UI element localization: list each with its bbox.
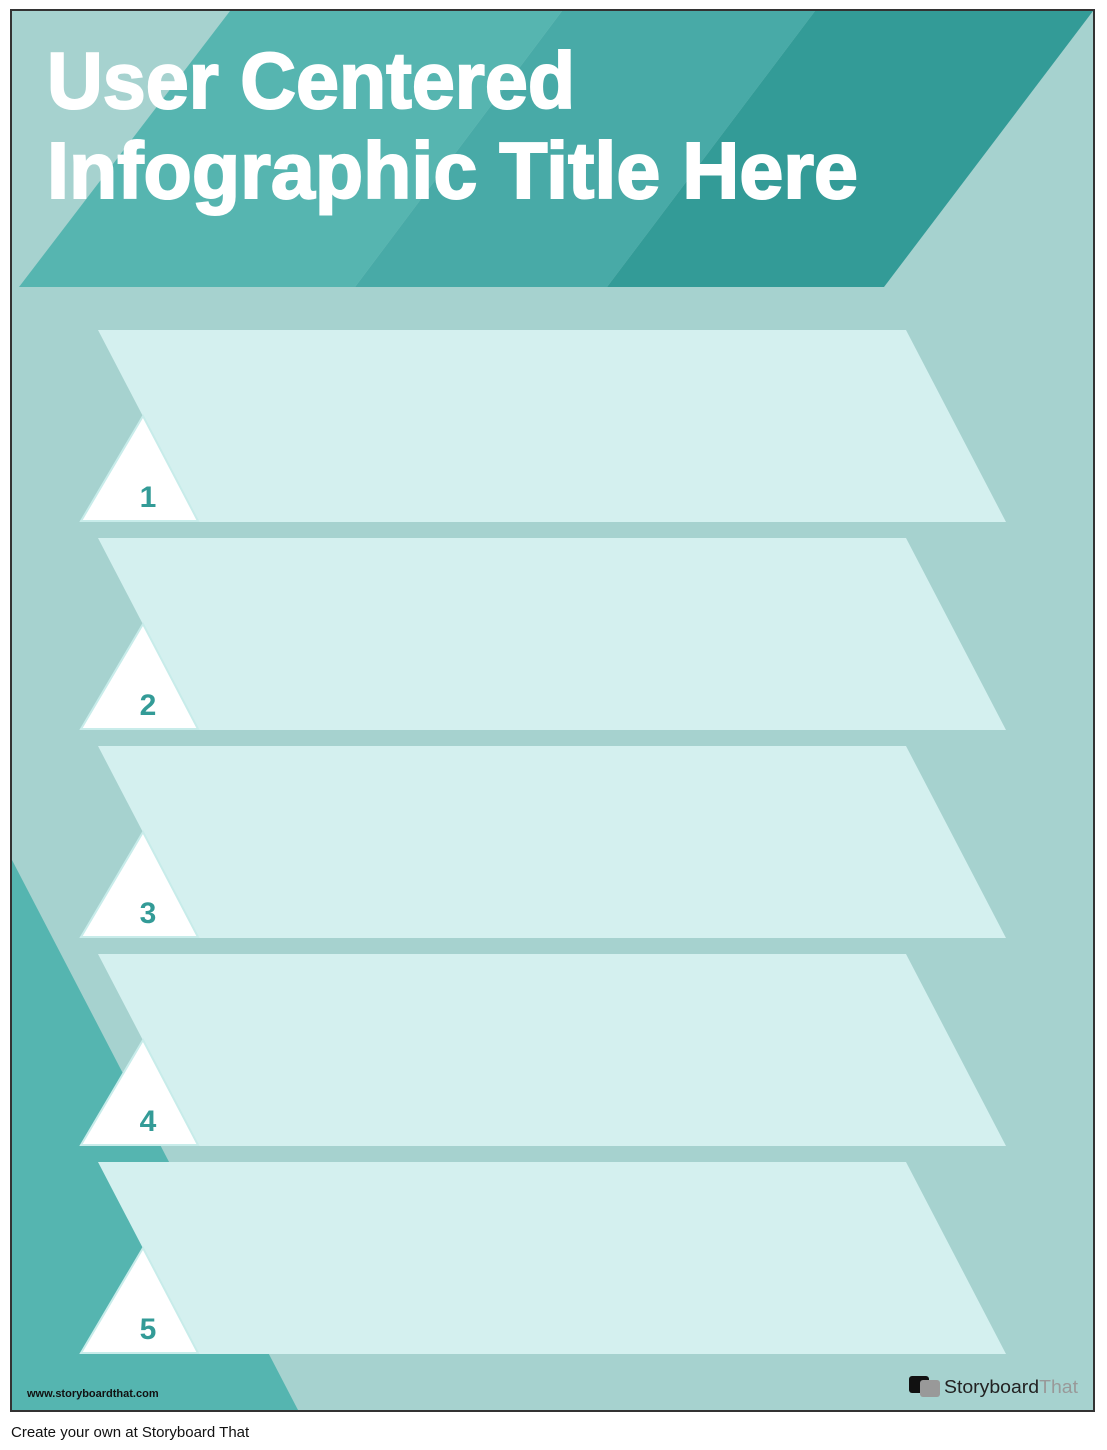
step 5 bbox=[81, 1162, 1006, 1354]
title: User Centered bbox=[47, 36, 575, 125]
logo: Storyboard That bbox=[944, 1377, 1078, 1397]
step 5: 5 bbox=[140, 1313, 156, 1346]
step 2 bbox=[81, 538, 1006, 730]
step 1: 1 bbox=[140, 481, 156, 514]
step 3 bbox=[81, 746, 1006, 938]
step 4: 4 bbox=[140, 1105, 157, 1138]
decorative bottom-left teal shape bbox=[12, 860, 298, 1410]
step 2: 2 bbox=[140, 689, 156, 722]
title: Infographic Title Here bbox=[47, 126, 858, 215]
step 1 bbox=[81, 330, 1006, 522]
step 4 bbox=[81, 954, 1006, 1146]
step 3: 3 bbox=[140, 897, 156, 930]
footer url: www.storyboardthat.com bbox=[26, 1388, 159, 1400]
bottom caption: Create your own at Storyboard That bbox=[11, 1424, 250, 1441]
header banner bbox=[19, 11, 1093, 287]
